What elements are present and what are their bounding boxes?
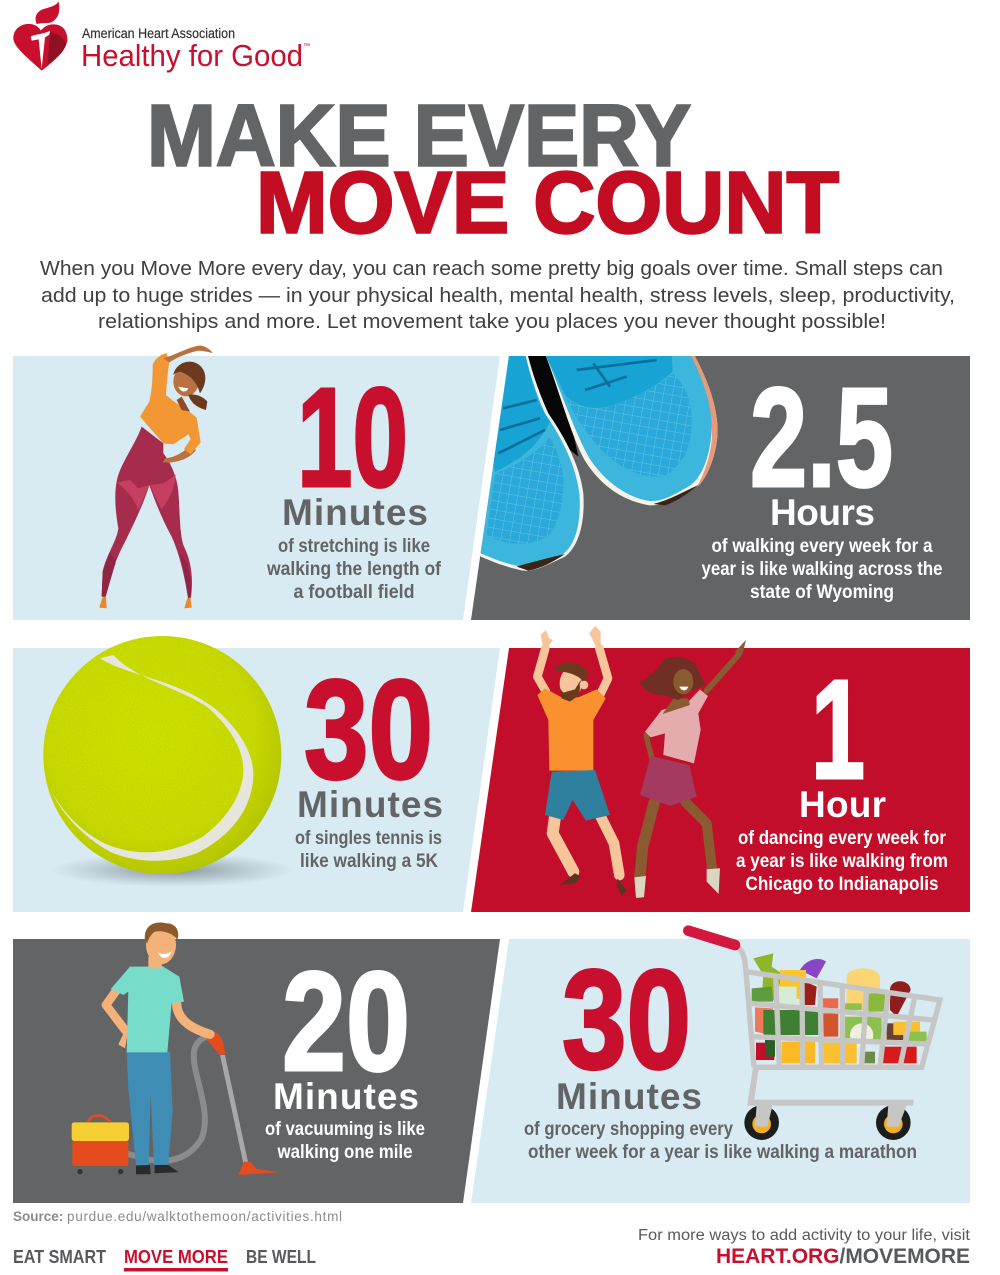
unit: Minutes: Minutes (273, 1076, 419, 1117)
icon: ball shadow (51, 853, 295, 887)
call to action (638, 1227, 971, 1268)
footer navigation: EAT SMART (13, 1247, 106, 1267)
panel: 2.5 hours walking (460, 353, 970, 620)
description: other week for a year is like walking a marathon (528, 1141, 917, 1163)
source citation: Source: purdue.edu/walktothemoon/activities.html (13, 1209, 342, 1224)
panel: 10 minutes stretching (13, 346, 500, 620)
description: like walking a 5K (300, 850, 438, 872)
description: of walking every week for a (712, 535, 933, 557)
illustration: tennis ball (43, 636, 281, 874)
title (147, 88, 839, 252)
description: of dancing every week for (738, 827, 946, 849)
illustration: stretching woman (99, 346, 213, 608)
stat: 30: 30 (562, 940, 691, 1098)
description: of stretching is like (278, 535, 430, 557)
panel: 30 minutes tennis (13, 636, 500, 912)
description: a year is like walking from (736, 850, 948, 872)
unit: Minutes: Minutes (556, 1076, 702, 1117)
intro text (40, 258, 955, 333)
title line: MOVE COUNT: MOVE COUNT (256, 154, 839, 252)
logo text: American Heart Association: American Heart Association (82, 26, 235, 41)
description: Chicago to Indianapolis (746, 873, 939, 895)
call to action: For more ways to add activity to your life, visit (638, 1227, 971, 1244)
illustration: dancing man (537, 626, 627, 896)
description (266, 535, 441, 603)
description (295, 827, 442, 872)
description: walking one mile (277, 1141, 413, 1163)
intro text: add up to huge strides — in your physical health, mental health, stress levels, sleep, productivity, (41, 285, 955, 307)
panel: 1 hour dancing (471, 626, 970, 912)
description: of grocery shopping every (524, 1118, 733, 1140)
cart frame (738, 947, 940, 1103)
illustration: man with vacuum (72, 922, 280, 1175)
footer navigation (13, 1247, 316, 1272)
illustration: dancing woman (634, 640, 746, 898)
description: of singles tennis is (295, 827, 442, 849)
stat: 2.5: 2.5 (750, 358, 893, 516)
panel: 20 minutes vacuuming (13, 922, 500, 1203)
intro text: relationships and more. Let movement take you places you never thought possible! (98, 311, 886, 333)
logo: American Heart Association Healthy for Good (13, 1, 310, 73)
groceries (752, 953, 927, 1063)
stat: 10: 10 (297, 358, 408, 516)
description: of vacuuming is like (265, 1118, 425, 1140)
illustration: blue sneakers (460, 353, 718, 571)
icon: heart and torch (13, 1, 67, 71)
illustration: shopping cart (688, 931, 940, 1140)
description: year is like walking across the (702, 558, 943, 580)
unit: Hours: Hours (770, 492, 875, 533)
description: walking the length of (266, 558, 441, 580)
stat: 20: 20 (282, 942, 410, 1100)
panel: 30 minutes grocery shopping (471, 931, 970, 1203)
title line: MAKE EVERY: MAKE EVERY (147, 88, 691, 184)
unit: Minutes: Minutes (297, 784, 443, 825)
description (524, 1118, 917, 1163)
footer navigation: BE WELL (246, 1247, 316, 1267)
footer navigation: MOVE MORE (124, 1247, 228, 1267)
intro text: When you Move More every day, you can reach some pretty big goals over time. Small steps can (40, 258, 943, 280)
description (702, 535, 943, 603)
cart handle (688, 931, 735, 945)
call to action: HEART.ORG/MOVEMORE (716, 1245, 970, 1268)
logo text: Healthy for Good: Healthy for Good (81, 38, 303, 73)
description: state of Wyoming (750, 581, 894, 603)
logo trademark: ™ (303, 43, 310, 50)
stat: 30: 30 (304, 650, 433, 808)
unit: Hour: Hour (799, 784, 886, 825)
description (736, 827, 948, 895)
stat: 1: 1 (811, 650, 865, 808)
description (265, 1118, 425, 1163)
description: a football field (294, 581, 414, 603)
wheels (744, 1105, 911, 1140)
unit: Minutes: Minutes (282, 492, 428, 533)
